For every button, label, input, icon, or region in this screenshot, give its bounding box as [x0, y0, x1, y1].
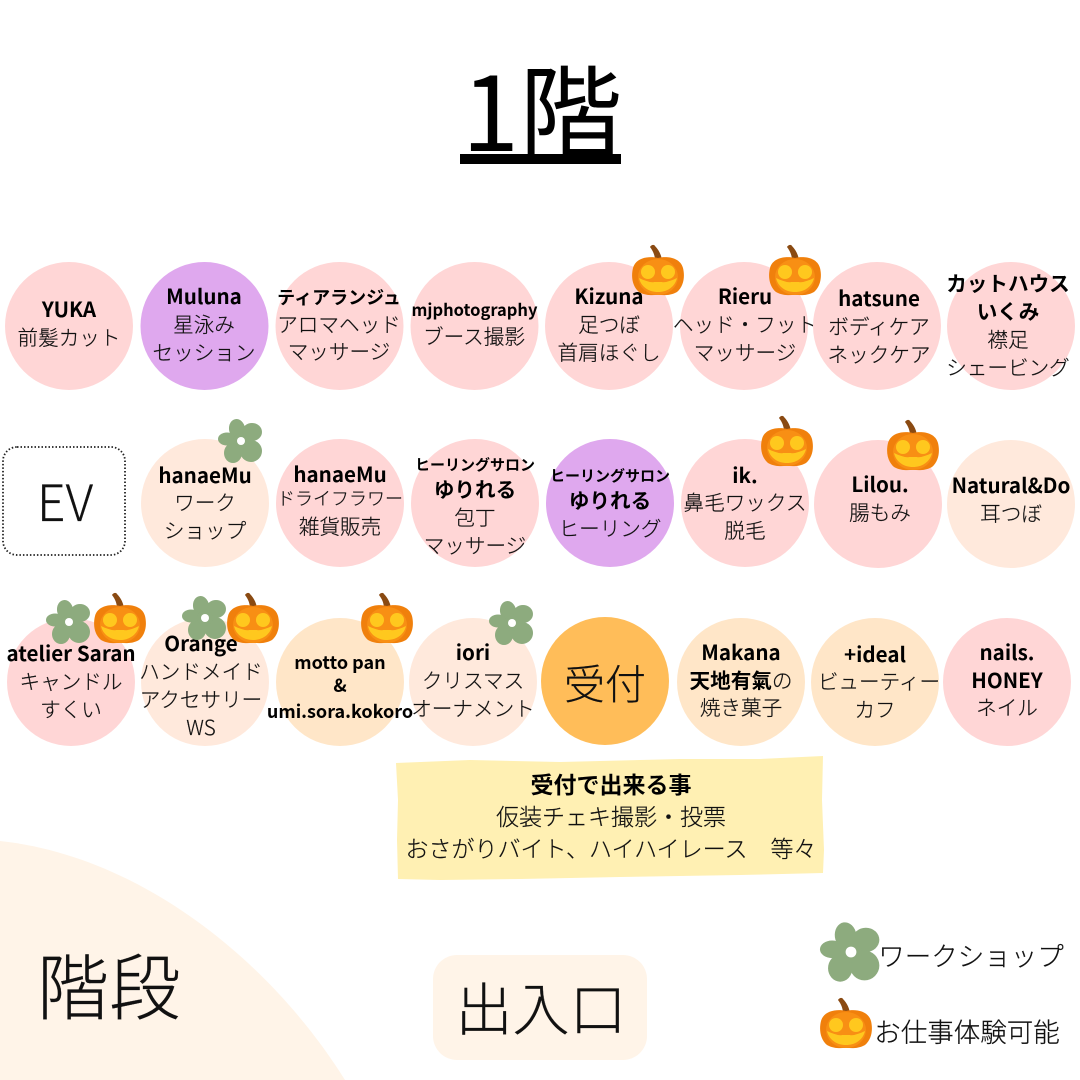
callout: reception activities: おさがりバイト、ハイハイレース 等々 — [405, 830, 817, 864]
stall: hanaeMu workshop: hanaeMu — [158, 459, 252, 489]
stall: Natural&Do: Natural&Do — [952, 469, 1070, 499]
stall: hanaeMu dry flower: ドライフラワー — [277, 485, 403, 511]
stall: Kizuna: 足つぼ — [578, 308, 640, 338]
entrance — [433, 955, 647, 1060]
stall: ゆりれる knife massage: ゆりれる — [434, 473, 516, 503]
stall: hatsune: ボディケア — [828, 310, 930, 340]
icon: pumpkin ik. — [761, 416, 813, 466]
stall: YUKA: YUKA — [41, 293, 97, 323]
stall: Kizuna: Kizuna — [574, 280, 644, 310]
icon: pumpkin motto pan — [361, 593, 413, 643]
stall: +ideal — [811, 618, 940, 746]
legend: workshop — [820, 921, 1064, 982]
stall: +ideal: カフ — [854, 693, 896, 723]
stall: ゆりれる knife massage: 包丁 — [454, 501, 496, 531]
stall: YUKA — [5, 262, 133, 390]
stall: nails. HONEY: ネイル — [976, 691, 1038, 721]
stall: ik.: 鼻毛ワックス — [684, 486, 806, 516]
stall: ティアランジュ — [276, 262, 404, 390]
stall: Orange: ハンドメイド — [139, 655, 263, 685]
stall: Rieru: Rieru — [718, 280, 772, 310]
stall: Muluna: 星泳み — [173, 308, 235, 338]
legend: job experience: お仕事体験可能 — [874, 1011, 1060, 1050]
stall: iori: オーナメント — [411, 692, 535, 722]
stall: Lilou.: 腸もみ — [849, 496, 911, 526]
stall: atelier Saran — [6, 618, 136, 746]
stall: nails. HONEY: nails. — [979, 636, 1035, 666]
stall: hatsune: hatsune — [838, 282, 920, 312]
panel: stairs corner — [0, 841, 345, 1080]
stall: Rieru: ヘッド・フット — [673, 308, 817, 338]
icon: pumpkin Orange — [227, 593, 279, 643]
stall: ゆりれる knife massage: マッサージ — [424, 529, 526, 559]
stall: iori — [409, 618, 537, 746]
stall: hanaeMu dry flower: 雑貨販売 — [299, 510, 381, 540]
reception circle: 受付 — [564, 651, 646, 711]
legend: job experience — [820, 998, 1060, 1050]
stall: Makana: 天地有氣の — [690, 664, 792, 694]
stall: Muluna — [140, 262, 268, 390]
stall: motto pan: motto pan — [294, 649, 386, 675]
stall: Kizuna — [545, 262, 673, 390]
stall: nails. HONEY: HONEY — [971, 664, 1044, 694]
stall: ik.: 脱毛 — [724, 514, 766, 544]
stall: Orange: WS — [186, 711, 216, 741]
stall: hatsune: ネックケア — [828, 338, 930, 368]
stall: mjphotography — [410, 262, 538, 390]
stall: カットハウスいくみ: シェービング — [946, 351, 1070, 381]
stall: Orange — [139, 618, 269, 746]
stall: nails. HONEY — [943, 618, 1071, 746]
stall: ik.: ik. — [732, 459, 758, 489]
icon: flower Orange — [182, 595, 226, 640]
stall: ゆりれる knife massage: ヒーリングサロン — [415, 454, 535, 475]
stall: motto pan — [267, 618, 413, 746]
stall: カットハウスいくみ: いくみ — [977, 295, 1039, 325]
stall: カットハウスいくみ — [946, 262, 1075, 390]
stall: +ideal: ビューティー — [818, 665, 940, 695]
stall: atelier Saran: すくい — [40, 693, 102, 723]
stall: Muluna: セッション — [153, 336, 255, 366]
icon: flower iori — [489, 600, 533, 645]
stall: Rieru — [673, 262, 817, 390]
stall: ティアランジュ: アロマヘッド — [277, 308, 401, 338]
stall: iori: iori — [456, 636, 490, 666]
reception circle — [541, 617, 669, 745]
entrance: 出入口 — [456, 965, 626, 1047]
stall: motto pan: umi.sora.kokoro — [267, 698, 413, 724]
stall: hanaeMu workshop: ショップ — [164, 514, 247, 544]
stall: atelier Saran: キャンドル — [20, 665, 122, 695]
stall: ik. — [681, 439, 809, 567]
elevator box: EV — [37, 464, 94, 536]
icon: pumpkin Kizuna — [632, 245, 684, 295]
stall: ゆりれる healing — [546, 439, 674, 567]
title: 1階 — [462, 32, 622, 181]
stall: iori: クリスマス — [422, 664, 524, 694]
legend: workshop: ワークショップ — [878, 935, 1064, 974]
stall: hatsune — [813, 262, 941, 390]
stall: Muluna: Muluna — [166, 280, 242, 310]
stall: YUKA: 前髪カット — [18, 321, 120, 351]
callout: reception activities: 受付で出来る事 — [530, 766, 692, 800]
stall: カットハウスいくみ: 襟足 — [987, 323, 1029, 353]
stall: Kizuna: 首肩ほぐし — [558, 336, 660, 366]
stall: Rieru: マッサージ — [694, 336, 796, 366]
stall: Natural&Do — [947, 440, 1075, 568]
stall: mjphotography: mjphotography — [412, 297, 538, 321]
stall: Makana: 焼き菓子 — [700, 691, 782, 721]
stall: ゆりれる healing: ヒーリング — [559, 512, 661, 542]
stall: Makana: Makana — [701, 636, 781, 666]
callout: reception activities — [396, 756, 824, 880]
icon: pumpkin atelier Saran — [94, 593, 146, 643]
stall: カットハウスいくみ: カットハウス — [946, 267, 1070, 297]
icon: pumpkin Lilou. — [887, 420, 939, 470]
stall: ティアランジュ: ティアランジュ — [277, 284, 401, 310]
stall: ティアランジュ: マッサージ — [288, 335, 390, 365]
stall: +ideal: +ideal — [844, 638, 907, 668]
icon: flower atelier Saran — [46, 599, 90, 644]
stall: hanaeMu dry flower: hanaeMu — [293, 458, 387, 488]
stall: ゆりれる healing: ヒーリングサロン — [550, 465, 670, 486]
icon: flower hanaeMu — [218, 418, 262, 463]
icon: pumpkin Rieru — [769, 245, 821, 295]
stall: motto pan: & — [333, 672, 347, 698]
stairs label: 階段 — [37, 930, 181, 1035]
stall: ゆりれる healing: ゆりれる — [569, 484, 651, 514]
stall: Orange: アクセサリー — [140, 683, 262, 713]
stall: Makana — [677, 618, 805, 746]
callout: reception activities: 仮装チェキ撮影・投票 — [496, 798, 726, 832]
stall: ゆりれる knife massage — [411, 439, 539, 567]
stall: hanaeMu workshop — [141, 439, 269, 567]
elevator box — [3, 447, 125, 555]
stall: atelier Saran: atelier Saran — [6, 637, 136, 667]
stall: hanaeMu workshop: ワーク — [174, 486, 236, 516]
stall: Lilou.: Lilou. — [851, 468, 909, 498]
stall: Lilou. — [814, 440, 942, 568]
stall: Natural&Do: 耳つぼ — [980, 497, 1042, 527]
stall: Orange: Orange — [164, 627, 238, 657]
stall: hanaeMu dry flower — [276, 439, 404, 567]
stall: mjphotography: ブース撮影 — [423, 320, 525, 350]
